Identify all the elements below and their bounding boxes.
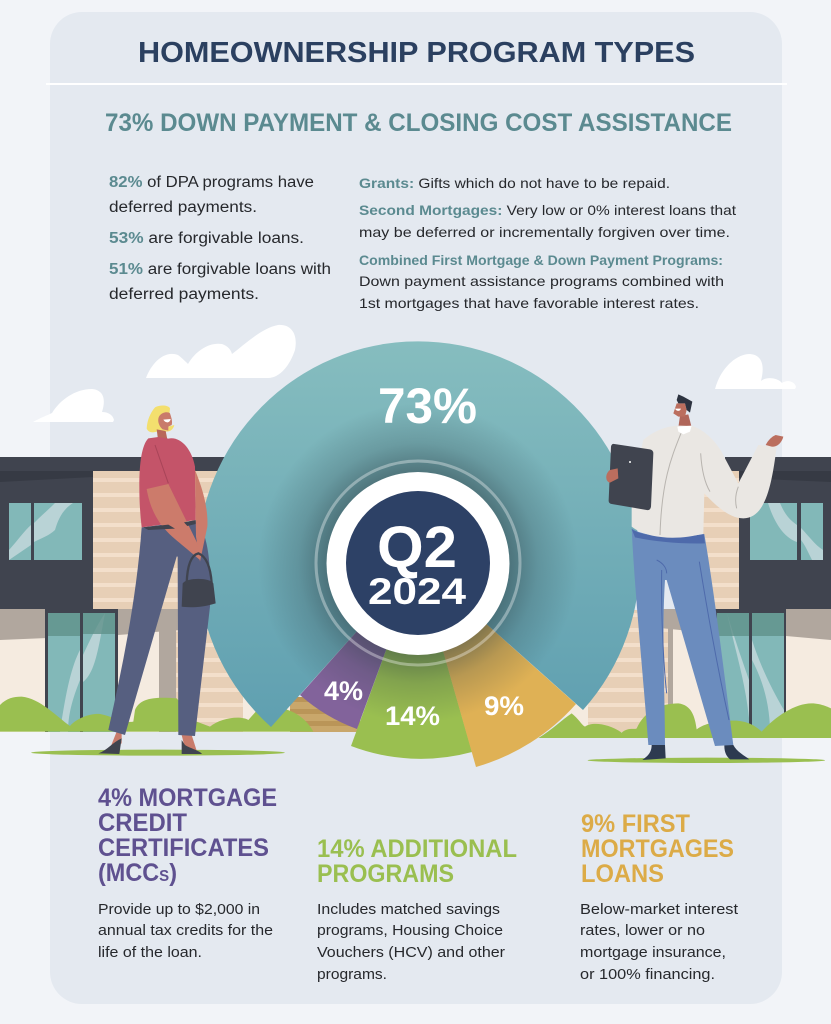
description: MCC: annual tax credits for the (98, 923, 273, 939)
description: first mortgages: or 100% financing. (580, 967, 715, 983)
right glass door (715, 609, 786, 732)
heading: 9% first mortgages (581, 810, 734, 888)
card: 4% mortgage credit certificates (98, 784, 277, 961)
chart: pie of program types (197, 341, 640, 767)
text block: DPA statistics: 51% are forgivable loans with (109, 261, 331, 278)
label: 4%: 4% (324, 676, 363, 706)
text block: program definitions: Grants: Gifts which do not have to be repaid. (359, 175, 670, 191)
description: MCC: Provide up to $2,000 in (98, 902, 260, 918)
label: 9%: 9% (484, 691, 524, 721)
text block: DPA statistics: 82% of DPA programs have (109, 174, 314, 191)
heading: 14% additional (317, 835, 517, 888)
icon: small left cloud (33, 389, 114, 422)
description: additional: programs. (317, 967, 387, 983)
heading: 14% additional: 14% ADDITIONAL (317, 835, 517, 863)
title: HOMEOWNERSHIP PROGRAM TYPES (138, 37, 695, 69)
illustration: man with tablet (588, 394, 825, 763)
heading: 4% MCC: (MCCS) (98, 859, 177, 887)
heading: 4% MCC (98, 784, 277, 887)
label: 2024: 2024 (368, 571, 467, 612)
description: MCC (98, 902, 273, 961)
icon: large cloud (146, 325, 296, 378)
illustration: house right side (565, 457, 831, 732)
description: first mortgages: Below-market interest (580, 902, 738, 918)
center badge white ring (326, 472, 510, 655)
window (9, 503, 82, 560)
label: 73%: 73% (378, 378, 477, 434)
description: MCC: life of the loan. (98, 945, 202, 961)
text block: program definitions: may be deferred or incrementally forgiven over time. (359, 224, 730, 240)
slice: 9% first mortgages (418, 563, 576, 767)
illustration: woman with handbag (31, 406, 285, 756)
slice: 14% additional programs (351, 563, 472, 759)
heading: 4% MCC: CREDIT (98, 809, 187, 837)
text block: DPA statistics: 53% are forgivable loans. (109, 230, 304, 247)
right window (750, 503, 823, 560)
heading: 4% MCC: CERTIFICATES (98, 834, 269, 862)
slice: 73% down payment assistance (197, 341, 640, 727)
text block: DPA statistics: deferred payments. (109, 199, 257, 216)
center badge navy (346, 491, 490, 635)
illustration: left bushes and lawn (0, 697, 313, 732)
description: additional: programs, Housing Choice (317, 923, 503, 939)
illustration: house left side (0, 457, 360, 732)
text block: program definitions (359, 175, 736, 311)
icon: right cloud (715, 354, 796, 389)
tablet (609, 444, 653, 510)
description: first mortgages: rates, lower or no (580, 923, 705, 939)
text block: DPA statistics: deferred payments. (109, 286, 259, 303)
wooden steps (290, 697, 360, 732)
text block: DPA statistics (109, 174, 331, 303)
heading: 4% MCC: 4% MORTGAGE (98, 784, 277, 812)
text block: program definitions: Second Mortgages: Very low or 0% interest loans that (359, 202, 736, 218)
description: first mortgages: mortgage insurance, (580, 945, 726, 961)
slice: 4% mortgage credit certificates (300, 563, 418, 729)
text block: program definitions: 1st mortgages that have favorable interest rates. (359, 295, 699, 311)
subheading: 73% down payment: 73% DOWN PAYMENT & CLOSING COST ASSISTANCE (105, 109, 732, 137)
heading: 9% first mortgages: MORTGAGES (581, 835, 734, 863)
label: Q2: Q2 (377, 515, 457, 580)
heading: 9% first mortgages: 9% FIRST (581, 810, 690, 838)
glass door (45, 609, 118, 732)
card: 14% additional programs (317, 835, 517, 983)
description: first mortgages (580, 902, 738, 983)
label: 14%: 14% (385, 701, 440, 731)
description: additional (317, 902, 505, 983)
heading: 14% additional: PROGRAMS (317, 860, 454, 888)
card: 9% first mortgages (580, 810, 738, 983)
text block: program definitions: Combined First Mortgage & Down Payment Programs: (359, 252, 723, 268)
description: additional: Includes matched savings (317, 902, 500, 918)
heading: 9% first mortgages: LOANS (581, 860, 664, 888)
illustration: right bushes and lawn (538, 703, 831, 738)
text block: program definitions: Down payment assistance programs combined with (359, 273, 724, 289)
description: additional: Vouchers (HCV) and other (317, 945, 505, 961)
